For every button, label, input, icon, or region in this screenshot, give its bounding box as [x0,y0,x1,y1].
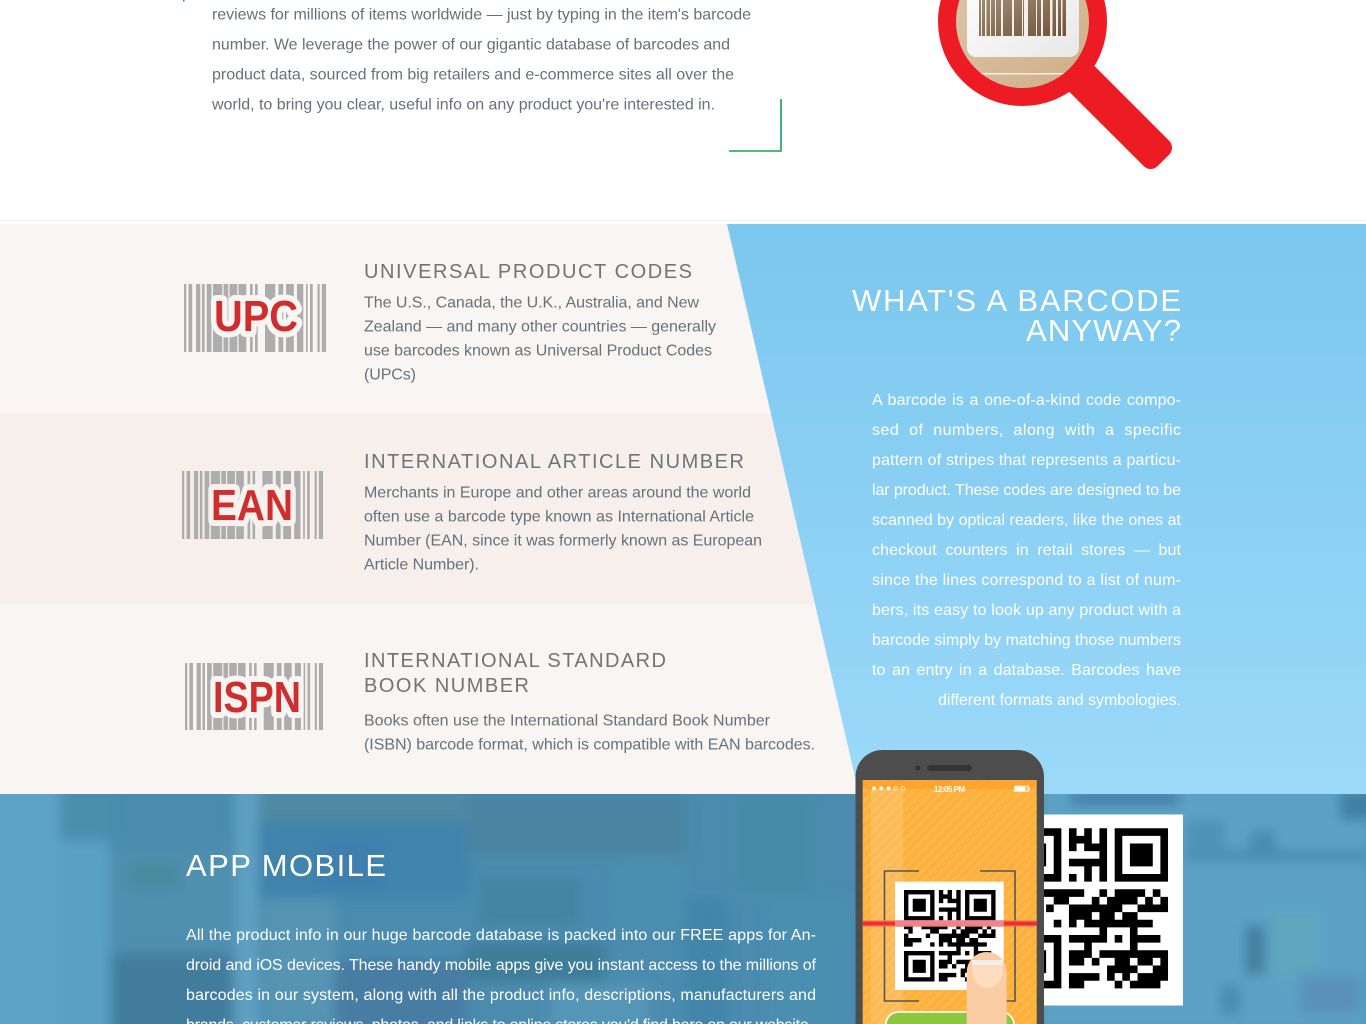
text: EAN description: Number (EAN, since it was formerly known as European [364,532,762,550]
heading: what's a barcode anyway: ANYWAY? [1026,313,1181,348]
intro text: world, to bring you clear, useful info on any product you're interested in. [211,96,715,114]
panel: EAN [0,414,860,604]
red scan line [863,920,1037,927]
intro text [211,6,751,114]
icon: UPC barcode badge: UPC [214,292,298,341]
text: ISBN description: Books often use the International Standard Book Number [364,712,771,730]
illustration: large QR code card [990,814,1183,1006]
panel: UPC [0,224,860,414]
text: EAN description: often use a barcode type known as International Article [364,508,754,526]
text: barcode explanation: to an entry in a database. Barcodes have [872,662,1181,679]
icon: EAN barcode badge: EAN [211,481,293,530]
heading: international standard book number: INTERNATIONAL STANDARD [364,650,666,672]
text: barcode explanation: lar product. These codes are designed to be [872,482,1181,499]
scanner frame brackets [884,871,1015,1001]
heading: international standard book number: BOOK NUMBER [364,675,529,697]
intro text: product data, sourced from big retailers and e-commerce sites all over the [212,66,734,84]
small QR code [895,882,1004,990]
text: app mobile description: barcodes in our system, along with all the product info, descriptions, manufacturers and [186,987,816,1004]
intro text: number. We leverage the power of our gigantic database of barcodes and [212,36,730,54]
text: ISBN description [364,712,815,754]
heading: international article number: INTERNATIONAL ARTICLE NUMBER [364,451,744,473]
text: barcode explanation: scanned by optical readers, like the ones at [872,512,1182,529]
section divider [0,220,1366,221]
green corner bracket tip [183,0,184,2]
green button [886,1012,1014,1024]
green corner bracket [729,99,781,151]
status bar time: 12:05 PM [934,785,965,794]
icon: EAN barcode badge [182,471,323,539]
text: UPC description: (UPCs) [364,366,416,384]
intro text: reviews for millions of items worldwide — just by typing in the item's barcode [212,6,751,24]
heading: app mobile: APP MOBILE [186,848,386,883]
status bar signal dots [872,786,904,790]
illustration: phone scanning QR code [856,750,1044,1024]
heading: what's a barcode anyway: WHAT'S A BARCODE [852,283,1181,318]
text: ISBN description: (ISBN) barcode format, which is compatible with EAN barcodes. [364,736,815,754]
status bar battery [1014,786,1030,792]
icon: magnifying glass over barcode [947,0,1176,173]
phone body [856,750,1044,1024]
text: UPC description: Zealand — and many other countries — generally [364,318,716,336]
panel: app mobile blurred store photo background [0,780,1366,1024]
icon: ISPN barcode badge [185,663,323,730]
text: UPC description: use barcodes known as Universal Product Codes [364,342,712,360]
text: UPC description [364,294,716,384]
text: barcode explanation: barcode simply by matching those numbers [872,632,1181,649]
text: barcode explanation: pattern of stripes that represents a particu- [872,452,1181,469]
text: barcode explanation: sed of numbers, along with a specific [872,422,1181,439]
panel: what's a barcode blue background [727,224,1366,794]
heading: what's a barcode anyway [852,283,1181,348]
text: barcode explanation: different formats and symbologies. [938,692,1181,709]
text: barcode explanation: since the lines correspond to a list of num- [872,572,1181,589]
text: EAN description [364,484,762,574]
finger [967,952,1007,1024]
text: UPC description: The U.S., Canada, the U.K., Australia, and New [364,294,699,312]
text: barcode explanation: bers, its easy to look up any product with a [872,602,1181,619]
text: app mobile description: All the product info in our huge barcode database is packed into our FREE apps for An- [186,927,816,944]
text: barcode explanation: A barcode is a one-of-a-kind code compo- [872,392,1181,409]
icon: ISPN barcode badge: ISPN [213,673,301,722]
text: barcode explanation [872,392,1182,709]
phone camera [916,766,920,770]
text: EAN description: Article Number). [364,556,479,574]
panel: ISBN [0,604,860,794]
text: app mobile description [186,927,817,1024]
phone screen [863,780,1037,1024]
text: app mobile description: droid and iOS devices. These handy mobile apps give you instant access to the millions of [186,957,817,974]
background: white top area [0,0,1366,220]
heading: international standard book number [364,650,666,697]
phone speaker [927,765,972,771]
text: EAN description: Merchants in Europe and other areas around the world [364,484,751,502]
icon: UPC barcode badge [184,284,326,352]
text: barcode explanation: checkout counters in retail stores — but [872,542,1182,559]
heading: universal product codes: UNIVERSAL PRODUCT CODES [364,261,692,283]
